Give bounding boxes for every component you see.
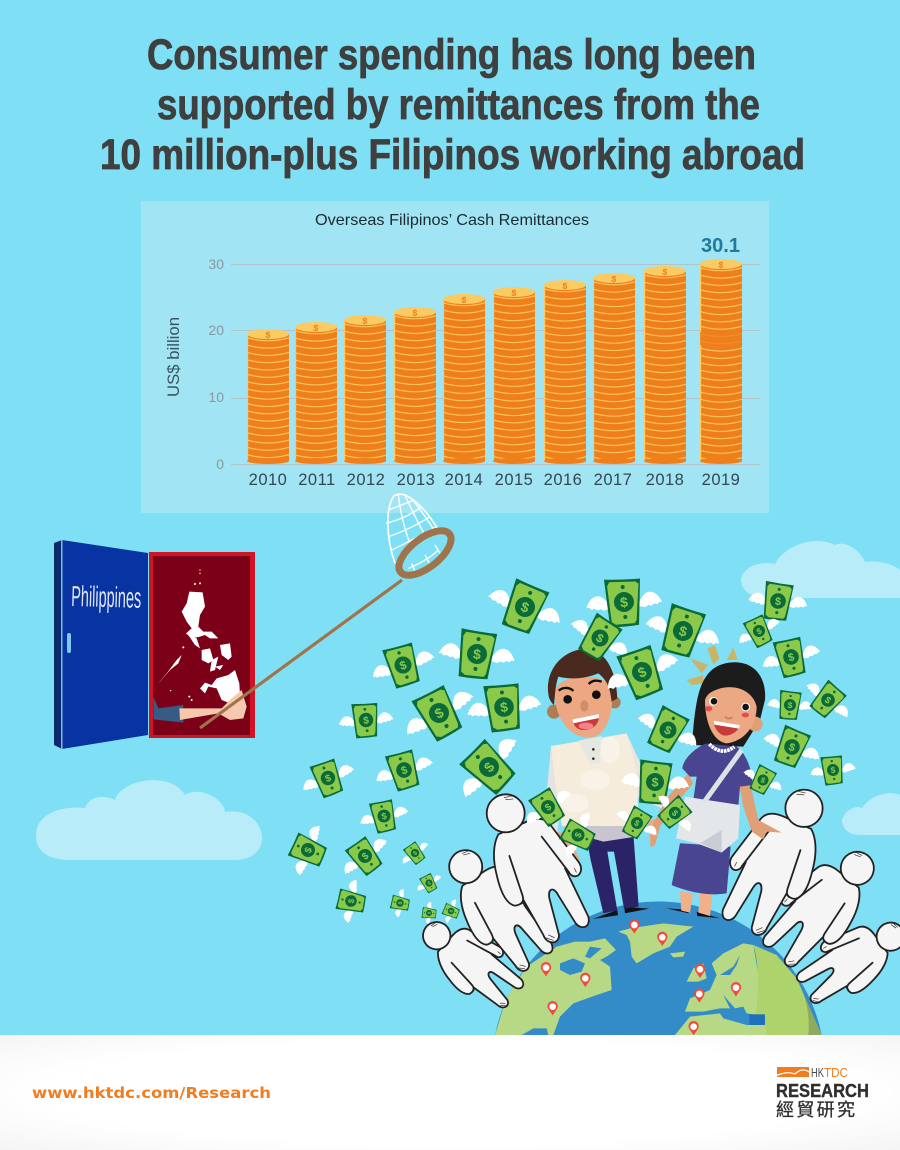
icon: winged bill: $ — [499, 699, 509, 715]
apron — [676, 797, 740, 853]
icon: winged bill — [337, 700, 395, 740]
eyes — [709, 697, 718, 706]
y axis labels and grid: 30 — [208, 256, 224, 272]
shoes — [593, 907, 649, 919]
icon: winged bill — [648, 786, 702, 841]
legs — [680, 892, 712, 916]
icon: winged bill — [630, 698, 706, 763]
icon: winged bill — [598, 636, 686, 709]
bar 2019: $ — [718, 260, 724, 270]
blouse — [682, 743, 752, 807]
icon: winged bill: $ — [363, 715, 370, 727]
bar 2014: $ — [461, 295, 467, 305]
bar 2012: $ — [362, 316, 368, 326]
net hoop — [392, 522, 458, 584]
icon: winged bill — [334, 826, 397, 886]
icon: winged bill: $ — [759, 775, 767, 786]
title: Consumer spending has long been — [147, 31, 756, 79]
headdress — [687, 645, 738, 685]
panel: remittances chart — [141, 201, 769, 513]
icon: winged bill: $ — [755, 625, 764, 637]
ears — [547, 705, 561, 719]
Iceland — [670, 952, 685, 957]
bar 2010 — [247, 329, 289, 464]
bar 2013: $ — [412, 308, 418, 318]
necklace — [709, 744, 734, 751]
hair — [692, 662, 765, 747]
globe — [495, 901, 822, 1035]
x axis labels: 2012 — [347, 471, 385, 489]
icon: winged bill — [439, 897, 463, 926]
figure: mid left — [447, 838, 556, 980]
icon: winged bill — [356, 795, 412, 837]
icon: winged bill: $ — [303, 845, 315, 855]
ear — [748, 717, 763, 731]
logo: RESEARCH — [776, 1080, 869, 1101]
nose — [580, 700, 588, 712]
icon: winged bill: $ — [774, 596, 782, 608]
face — [555, 677, 612, 737]
cloud: left — [36, 780, 262, 860]
logo: 經貿研究 — [776, 1096, 855, 1122]
icon: winged bill — [446, 723, 533, 812]
shoes — [666, 908, 720, 918]
left hand — [555, 832, 580, 863]
icon: winged bill: $ — [432, 704, 447, 722]
figure: small left — [419, 899, 529, 1026]
icon: winged bill — [394, 673, 484, 753]
icon: winged bill: $ — [787, 700, 793, 710]
y axis labels and grid: 10 — [208, 389, 224, 405]
icon: winged bill: $ — [472, 646, 482, 662]
y axis labels and grid: 20 — [208, 322, 224, 338]
icon: winged bill: $ — [635, 663, 649, 681]
hair — [548, 649, 617, 705]
Europe — [685, 943, 760, 1015]
title: 10 million-plus Filipinos working abroad — [100, 131, 805, 179]
bar 2011 — [295, 322, 337, 464]
arm and hand — [153, 690, 247, 723]
icon: winged bill — [282, 819, 334, 881]
icon: winged bill — [640, 598, 726, 665]
door knob — [67, 633, 71, 653]
icon: winged bill — [758, 631, 825, 683]
far edge shadow — [792, 970, 822, 1035]
bar 2013 — [394, 307, 436, 464]
icon: winged bill — [366, 636, 440, 695]
skirt — [672, 843, 731, 894]
icon: winged bill: $ — [398, 657, 409, 673]
icon: winged bill — [370, 743, 438, 797]
icon: winged bill — [619, 758, 691, 806]
icon: winged bill — [758, 719, 826, 775]
icon: winged bill — [747, 579, 809, 623]
y axis title: US$ billion — [165, 317, 183, 397]
x axis labels — [249, 471, 740, 489]
title — [100, 31, 805, 179]
icon: winged bill: $ — [633, 817, 642, 829]
icon: winged bill: $ — [413, 850, 419, 857]
icon: winged bill: $ — [400, 764, 409, 778]
man — [543, 649, 671, 919]
nose — [725, 717, 732, 719]
UK — [687, 963, 707, 982]
icon: winged bill: $ — [398, 901, 404, 905]
figure: mid right — [758, 834, 878, 981]
bar 2017: $ — [611, 274, 617, 284]
icon: winged bill: $ — [426, 911, 432, 914]
figure: small right — [790, 894, 900, 1027]
Hudson Bay — [560, 947, 602, 975]
flying money: front layer — [517, 604, 788, 864]
value label 30.1: 30.1 — [701, 235, 740, 257]
icon: winged bill — [437, 626, 517, 682]
door: Philippines — [54, 540, 148, 749]
flying money: back layer — [282, 571, 858, 926]
icon: winged bill: $ — [822, 695, 833, 707]
icon: winged bill: $ — [670, 808, 680, 818]
right hand — [648, 817, 662, 848]
door frame with map — [149, 552, 255, 738]
chart title: Overseas Filipinos’ Cash Remittances — [315, 212, 589, 229]
Baltic — [720, 955, 740, 975]
title: supported by remittances from the — [157, 81, 760, 129]
eyes — [563, 695, 572, 704]
bar 2016: $ — [562, 281, 568, 291]
logo: HK — [811, 1066, 824, 1080]
icon: winged bill: $ — [480, 759, 498, 775]
footer — [0, 1035, 900, 1150]
Gulf of Mexico — [522, 1028, 548, 1035]
logo: TDC — [824, 1066, 848, 1080]
map of the Philippines — [158, 569, 240, 703]
bar 2012 — [344, 315, 386, 464]
Asia shaded — [752, 945, 822, 1035]
icon: winged bill — [584, 575, 664, 630]
icon: winged bill: $ — [662, 722, 674, 738]
icon: winged bill — [738, 759, 788, 801]
icon: winged bill: $ — [324, 773, 333, 785]
bar 2011: $ — [313, 323, 319, 333]
arms — [650, 773, 693, 847]
icon: winged bill — [517, 778, 580, 836]
coin stack bars — [247, 259, 742, 464]
cloud: top right — [741, 541, 900, 598]
x axis labels: 2019 — [702, 471, 740, 489]
cloud: lower right — [842, 793, 900, 835]
icon: winged bill: $ — [543, 801, 554, 814]
y axis labels and grid: 0 — [216, 456, 224, 472]
pins — [541, 919, 741, 1035]
icon: winged bill: $ — [448, 909, 454, 913]
icon: winged bill: $ — [360, 850, 372, 863]
net mesh — [386, 494, 440, 572]
bar 2017 — [593, 273, 635, 464]
icon: winged bill — [766, 689, 814, 721]
icon: winged bill: $ — [594, 630, 607, 646]
icon: winged bill: $ — [787, 741, 797, 755]
Africa — [675, 1013, 767, 1035]
icon: winged bill: $ — [787, 651, 796, 664]
white figures left and right — [419, 790, 900, 1027]
Greenland — [618, 923, 693, 963]
bar 2018 — [644, 266, 686, 464]
icon: winged bill: $ — [519, 598, 532, 616]
North America — [495, 938, 616, 1035]
mouth — [572, 714, 599, 730]
icon: winged bill: $ — [347, 898, 356, 904]
couple in traditional dress — [543, 645, 782, 919]
icon: winged bill: $ — [651, 775, 659, 790]
x axis labels: 2018 — [646, 471, 684, 489]
butterfly net — [200, 494, 458, 728]
bar 2010: $ — [265, 330, 271, 340]
bar 2018: $ — [662, 267, 668, 277]
door label: Philippines — [71, 581, 142, 615]
icon: winged bill — [296, 752, 360, 805]
icon: winged bill: $ — [573, 831, 584, 840]
logo — [775, 1066, 869, 1122]
bar 2014 — [443, 294, 485, 464]
icon: winged bill: $ — [427, 880, 432, 887]
icon: winged bill — [421, 901, 437, 925]
icon: winged bill — [481, 571, 569, 643]
icon: winged bill — [562, 604, 638, 672]
x axis labels: 2014 — [445, 471, 483, 489]
icon: winged bill: $ — [677, 622, 689, 640]
barong — [543, 746, 563, 834]
bar 2015 — [493, 287, 535, 464]
mouth — [713, 721, 740, 736]
trousers — [587, 833, 639, 913]
bar 2019 — [700, 259, 742, 464]
icon: winged bill — [808, 753, 858, 788]
icon: winged bill — [553, 806, 603, 864]
x axis labels: 2011 — [298, 471, 336, 489]
sash — [704, 750, 742, 802]
icon: winged bill — [413, 869, 445, 897]
x axis labels: 2016 — [544, 471, 582, 489]
x axis labels: 2015 — [495, 471, 533, 489]
icon: winged bill — [396, 835, 434, 871]
figure: big left — [487, 794, 589, 942]
figure: big right — [722, 790, 823, 935]
woman's hand on figure — [752, 820, 782, 839]
face — [705, 687, 757, 743]
woman — [650, 645, 782, 918]
icon: winged bill — [333, 877, 369, 925]
icon: winged bill: $ — [619, 594, 629, 610]
y axis labels and grid — [208, 256, 760, 472]
website url: www.hktdc.com/Research — [32, 1084, 271, 1102]
x axis labels: 2017 — [594, 471, 632, 489]
icon: winged bill: $ — [830, 765, 836, 775]
net handle — [200, 580, 402, 728]
x axis labels: 2010 — [249, 471, 287, 489]
bar 2015: $ — [511, 288, 517, 298]
icon: winged bill — [797, 671, 858, 729]
bar 2016 — [544, 280, 586, 464]
icon: winged bill: $ — [380, 811, 388, 822]
icon: winged bill — [732, 608, 786, 655]
icon: winged bill — [464, 679, 544, 736]
x axis labels: 2013 — [397, 471, 435, 489]
icon: winged bill — [610, 800, 664, 847]
cheeks — [705, 706, 712, 711]
icon: winged bill — [389, 887, 412, 919]
